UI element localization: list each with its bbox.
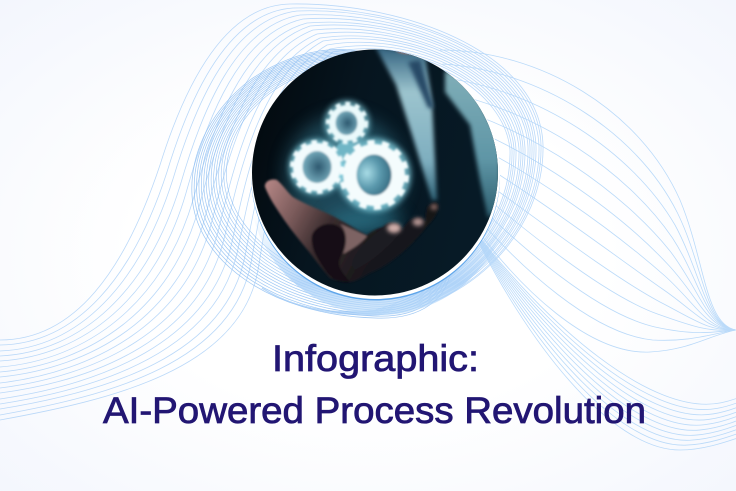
wave ribbon: right fan converging at the edge — [440, 50, 736, 352]
inner palm highlight — [340, 224, 367, 254]
wave ribbon: left loop around the circle — [192, 47, 454, 318]
large gear — [342, 143, 406, 207]
collar skin tone — [396, 52, 412, 56]
finger shadows — [352, 225, 401, 270]
title line 2: AI-Powered Process Revolution — [103, 390, 646, 431]
circular photo: hand holding glowing gears — [250, 46, 500, 298]
title — [103, 338, 646, 431]
hand — [265, 179, 439, 282]
gear glow — [285, 100, 411, 236]
wave ribbon: lower right swell — [470, 166, 736, 450]
wave ribbon: left tail looping over the circle — [0, 4, 543, 420]
top gear — [328, 104, 366, 142]
blue crescent under the circle — [249, 53, 511, 315]
white ring with blue rim — [251, 50, 500, 300]
fingertips — [387, 204, 438, 233]
left gear — [292, 142, 342, 192]
suit backdrop — [250, 48, 500, 298]
title line 1: Infographic: — [272, 338, 479, 379]
tie — [408, 60, 434, 108]
shirt and lapel highlights — [375, 46, 500, 218]
dark thumb fold — [312, 224, 350, 282]
